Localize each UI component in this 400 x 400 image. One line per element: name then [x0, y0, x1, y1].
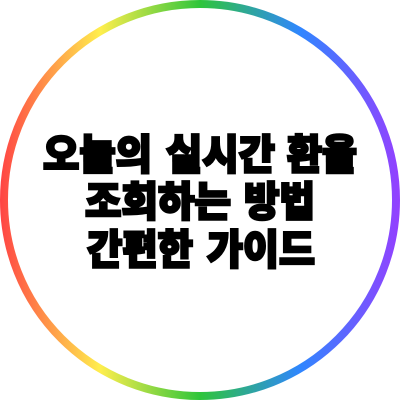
title line 3: 가이드	[207, 227, 315, 273]
title line 3: 간편한	[87, 227, 193, 273]
title line 1: 환율	[287, 132, 357, 178]
title line 2: 조회하는	[85, 179, 231, 225]
title line 1	[43, 132, 357, 178]
title line 1: 실시간	[166, 132, 275, 178]
title line 2	[85, 179, 315, 225]
title line 1: 오늘의	[43, 132, 152, 178]
title	[43, 132, 357, 273]
title line 2: 방법	[244, 179, 315, 225]
title line 3	[87, 227, 315, 273]
